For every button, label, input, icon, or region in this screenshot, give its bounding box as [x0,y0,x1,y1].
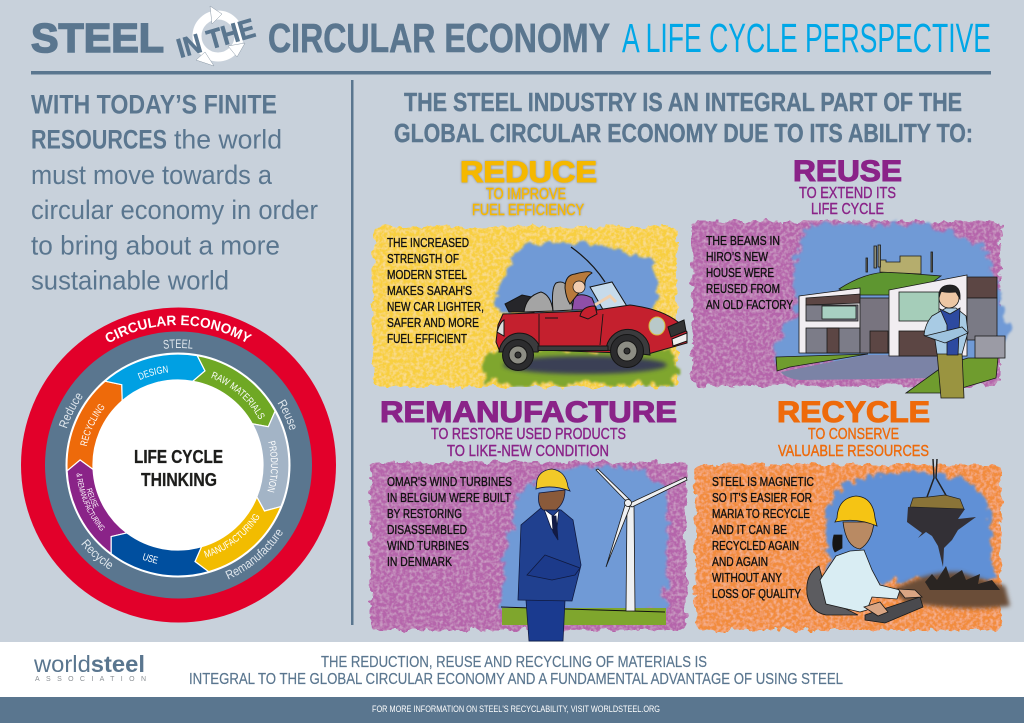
right house block [889,275,967,356]
recycle heading: VALUABLE RESOURCES [778,443,929,460]
footer message [189,654,843,688]
recycle text: LOSS OF QUALITY [712,586,801,601]
reuse text: HOUSE WERE [706,265,774,280]
intro text: sustainable world [31,266,229,296]
reduce text: THE INCREASED [387,235,469,250]
illustration: scrap pile [892,566,1010,608]
green ground [502,608,666,625]
arrow labels [76,366,278,564]
reuse text: AN OLD FACTORY [706,297,793,312]
reduce text: NEW CAR LIGHTER, [387,299,484,314]
recycle text: STEEL IS MAGNETIC [712,474,814,489]
arrow labels: REUSE [86,488,99,508]
green ground [484,350,676,384]
reduce text: MAKES SARAH'S [387,283,472,298]
remanufacture heading: REMANUFACTURE [380,396,677,429]
remanufacture text: BY RESTORING [387,506,462,521]
ring labels: Reuse [278,399,296,430]
title [31,6,991,66]
reuse text: REUSED FROM [706,281,780,296]
grass [776,354,868,371]
outer red ring [21,308,336,622]
centre label: LIFE CYCLE [134,446,223,467]
reduce text: FUEL EFFICIENT [387,331,467,346]
illustration: magnet crane [907,459,976,567]
arrow labels: USE [143,553,158,564]
reduce heading: FUEL EFFICIENCY [472,202,584,219]
panel: remanufacture [370,396,687,641]
logo: worldsteel: ASSOCIATION [35,676,146,683]
intro text: to bring about a more [31,230,280,260]
road shadow [503,356,667,374]
centre label: THINKING [141,469,217,490]
hill with factory [839,272,941,295]
intro text: RESOURCES [31,124,167,154]
remanufacture heading: TO RESTORE USED PRODUCTS [431,426,626,443]
reuse text: THE BEAMS IN [706,233,780,248]
remanufacture text: IN BELGIUM WERE BUILT [387,490,511,505]
recycle text: AND AGAIN [712,554,768,569]
remanufacture text: OMAR'S WIND TURBINES [387,474,512,489]
arrow labels: PRODUCTION [267,440,278,492]
arc label: circular economy: CIRCULAR ECONOMY [106,315,252,342]
recycle heading: TO CONSERVE [808,426,899,443]
title: CIRCULAR ECONOMY [268,15,610,61]
footer link text: FOR MORE INFORMATION ON STEEL'S RECYCLABILITY, VISIT WORLDSTEEL.ORG [372,704,660,714]
remanufacture text: DISASSEMBLED [387,522,467,537]
reduce heading: REDUCE [460,156,597,189]
arrow labels: DESIGN [138,366,168,380]
remanufacture text [387,474,512,569]
reuse heading: LIFE CYCLE [811,201,884,218]
car wheels [502,334,644,370]
recycle text: AND IT CAN BE [712,522,787,537]
blue sky patch [497,242,659,312]
ring labels: STEEL [164,339,192,349]
arrows: life cycle stages [67,354,289,576]
footer message: INTEGRAL TO THE GLOBAL CIRCULAR ECONOMY AND A FUNDAMENTAL ADVANTAGE OF USING STEEL [189,671,843,688]
ring labels: Recycle [81,538,112,569]
recycle text: SO IT'S EASIER FOR [712,490,812,505]
recycle text: WITHOUT ANY [712,570,782,585]
intro text: circular economy in order [31,195,318,225]
reuse heading: TO EXTEND ITS [799,185,896,202]
orange paint background [695,465,1001,630]
remanufacture text: WIND TURBINES [387,538,469,553]
panel: reduce [373,156,687,387]
ring labels: Remanufacture [225,530,283,580]
steel ring [45,332,312,598]
road [781,355,938,380]
yellow paint background [373,227,677,387]
illustration: woman at controls [807,496,923,623]
illustration: man in suit [518,469,581,641]
reuse heading: REUSE [793,155,902,188]
purple paint background [370,462,686,630]
reduce text [387,235,484,346]
blue sky patch [825,471,995,580]
intro text: must move towards a [31,160,273,190]
remanufacture text: IN DENMARK [387,554,452,569]
remanufacture heading: TO LIKE-NEW CONDITION [447,443,609,460]
right heading [394,87,973,148]
arrow labels: MANUFACTURING [204,514,260,558]
illustration: wind turbine [596,469,687,611]
left house block [799,288,860,353]
ring labels [58,339,296,580]
reduce heading [460,156,597,219]
ring labels: Reduce [58,394,82,428]
reduce text: SAFER AND MORE [387,315,479,330]
illustration: house [776,245,1005,398]
intro text: the world [174,124,282,154]
title: STEEL [31,15,164,61]
reduce text: STRENGTH OF [387,251,459,266]
reuse heading [793,155,902,218]
centre white disc [66,352,290,578]
reduce heading: TO IMPROVE [486,186,566,203]
recycle text [712,474,814,601]
remanufacture heading [380,396,677,460]
blue sky patch [774,225,1010,362]
recycle heading [777,396,930,460]
in the slanted label: IN THE [173,13,259,64]
intro text: WITH TODAY’S FINITE [31,90,277,120]
recycle heading: RECYCLE [777,396,930,429]
centre label [134,446,223,490]
arrow labels: RAW MATERIALS [211,372,265,419]
intro text [31,90,318,296]
blue sky patch [502,467,668,612]
recycle text: MARIA TO RECYCLE [712,506,810,521]
reuse text: HIRO’S NEW [706,249,769,264]
man with scarf [924,285,968,398]
footer band [0,642,1024,723]
arrow labels: & REMANUFACTURING [76,474,105,531]
illustration: red car [496,247,687,374]
panel: recycle [695,396,1010,630]
logo: worldsteel: worldsteel [33,651,145,677]
circular economy diagram [21,308,336,622]
panel: reuse [692,155,1010,398]
arrow labels: RECYCLING [80,404,104,446]
recycle text: RECYCLED AGAIN [712,538,799,553]
reduce text: MODERN STEEL [387,267,467,282]
footer message: THE REDUCTION, REUSE AND RECYCLING OF MATERIALS IS [321,654,707,671]
purple paint background [692,221,1000,386]
reuse text [706,233,793,312]
icon: recycling arrows ring [196,6,245,66]
